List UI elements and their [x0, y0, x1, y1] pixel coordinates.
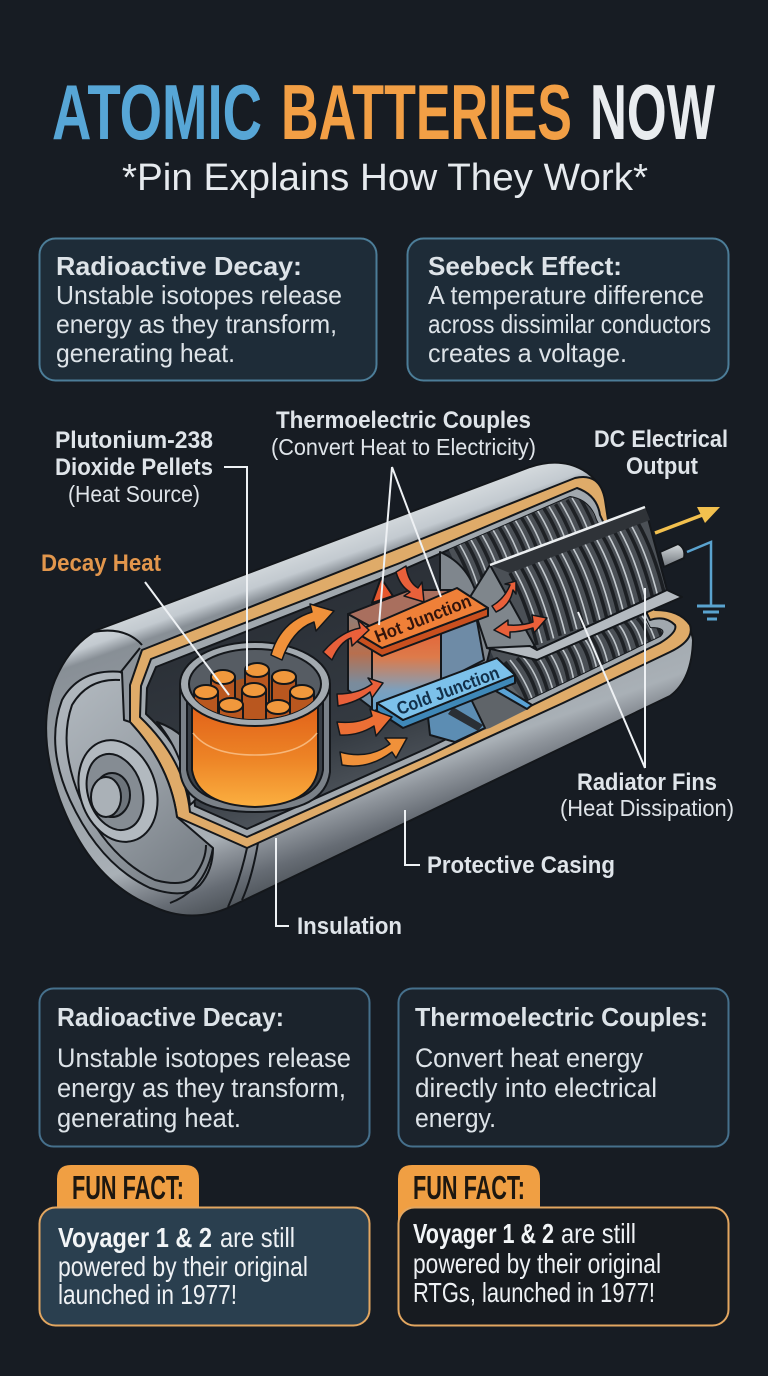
casing ridges: [93, 631, 258, 907]
fun fact card: are still: [220, 1222, 295, 1253]
heat flow arrows: [271, 566, 547, 766]
panel: thermoelectric couples: [398, 988, 728, 1146]
fun fact card: RTGs, launched in 1977!: [413, 1277, 655, 1308]
label: plutonium pellets: [55, 427, 213, 507]
label: decay heat: Decay Heat: [41, 550, 161, 577]
label: protective casing: Protective Casing: [427, 852, 615, 879]
terminal stub: [660, 544, 684, 567]
diagram: RTG cutaway: [46, 463, 693, 916]
panel: thermoelectric couples: Convert heat energy: [415, 1043, 643, 1073]
inner wall: [140, 488, 675, 837]
lower mount: [428, 660, 532, 742]
panel: radioactive decay bottom: Unstable isotopes release: [57, 1043, 351, 1073]
panel: seebeck effect: A temperature difference: [428, 280, 704, 310]
fun fact tab: FUN FACT:: [413, 1169, 525, 1206]
inner hub bulge: [157, 722, 203, 805]
leader lines: [145, 467, 645, 926]
label: plutonium pellets: Dioxide Pellets: [55, 454, 213, 481]
outer casing: [46, 463, 693, 916]
label: DC output: [594, 426, 728, 480]
panel: thermoelectric couples: energy.: [415, 1103, 496, 1133]
panel: seebeck effect: Seebeck Effect:: [428, 251, 622, 281]
cold junction plate: Cold Junction: [394, 662, 502, 719]
ground symbol: [687, 542, 725, 619]
label: plutonium pellets: (Heat Source): [68, 481, 200, 507]
label: radiator fins: [560, 769, 734, 821]
panel: radioactive decay top: Unstable isotopes release: [56, 280, 342, 310]
panel: seebeck effect: [408, 238, 728, 380]
canister: [180, 642, 330, 812]
fun fact card: [398, 1208, 728, 1326]
panel: radioactive decay bottom: Radioactive Decay:: [57, 1002, 284, 1032]
thermoelectric couple: [348, 578, 515, 728]
panel: radioactive decay top: energy as they transform,: [56, 309, 337, 339]
inner bulkhead disc: [440, 552, 490, 700]
label: DC output: DC Electrical: [594, 426, 728, 453]
radiator fin block: [470, 507, 682, 660]
DC output arrow: [655, 507, 720, 533]
panel: seebeck effect: across dissimilar conductors: [428, 309, 711, 339]
label: radiator fins: (Heat Dissipation): [560, 795, 734, 821]
insulation layer: [130, 477, 691, 848]
triangle heat marker: [372, 578, 393, 603]
fun fact card: powered by their original: [413, 1248, 661, 1279]
fun fact tab: [398, 1165, 540, 1225]
subtitle: *Pin Explains How They Work*: [122, 157, 648, 199]
fun fact card: Voyager 1 & 2: [413, 1218, 554, 1249]
hot junction plate: Hot Junction: [372, 591, 474, 647]
fun fact card: are still: [561, 1218, 636, 1249]
title: [52, 68, 715, 156]
label: DC output: Output: [626, 453, 698, 480]
fun fact right: [398, 1165, 728, 1326]
label: thermoelectric couples: Thermoelectric Couples: [276, 407, 531, 434]
end cap rim line: [67, 680, 206, 883]
panel: radioactive decay bottom: energy as they transform,: [57, 1073, 346, 1103]
label: thermoelectric couples: [271, 407, 536, 460]
end cap hub: [66, 730, 170, 852]
label: radiator fins: Radiator Fins: [577, 769, 717, 796]
title: BATTERIES: [281, 68, 572, 156]
fun fact card: Voyager 1 & 2: [58, 1222, 212, 1253]
fun fact tab: FUN FACT:: [72, 1169, 184, 1206]
label: insulation: Insulation: [297, 913, 402, 940]
panel: seebeck effect: creates a voltage.: [428, 338, 627, 368]
glowing core: [192, 700, 318, 807]
label: thermoelectric couples: (Convert Heat to Electricity): [271, 434, 536, 460]
fun fact card: powered by their original: [58, 1251, 308, 1282]
end cap face: [55, 672, 213, 893]
fun fact left: [40, 1165, 370, 1326]
panel: radioactive decay top: Radioactive Decay:: [56, 251, 302, 281]
title: ATOMIC: [52, 68, 262, 156]
fun fact tab: [57, 1165, 199, 1212]
pellets: [193, 670, 315, 719]
fun fact card: [40, 1208, 370, 1326]
label: plutonium pellets: Plutonium-238: [55, 427, 213, 454]
panel: radioactive decay bottom: generating heat.: [57, 1103, 241, 1133]
panel: radioactive decay top: [40, 238, 376, 380]
fun fact card: launched in 1977!: [58, 1279, 237, 1310]
panel: thermoelectric couples: directly into electrical: [415, 1073, 657, 1103]
panel: radioactive decay bottom: [40, 988, 370, 1146]
panel: thermoelectric couples: Thermoelectric Couples:: [415, 1002, 708, 1032]
back fins: [448, 497, 662, 700]
interior cavity: [146, 497, 662, 829]
panel: radioactive decay top: generating heat.: [56, 338, 235, 368]
